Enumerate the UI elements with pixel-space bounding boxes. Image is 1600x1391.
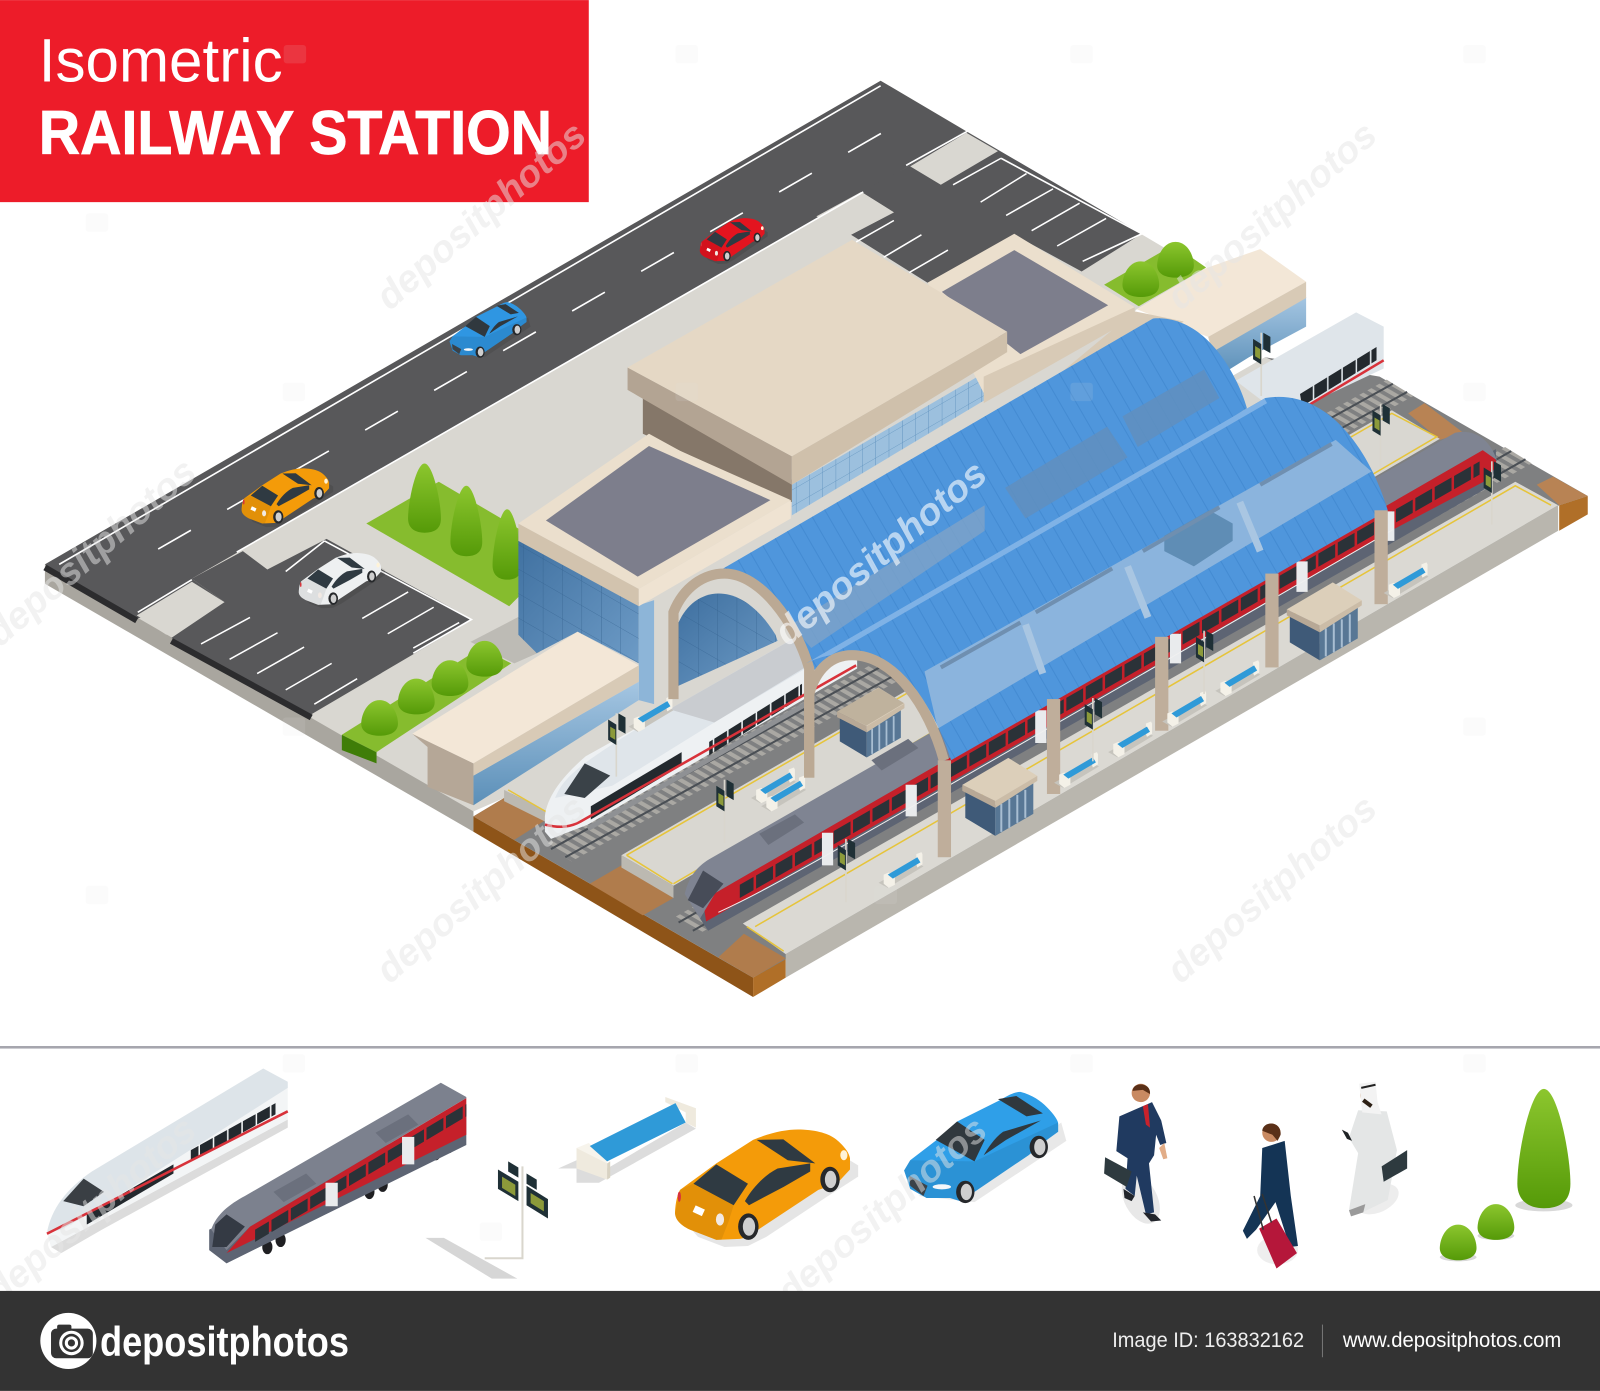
far white train end <box>1236 312 1384 406</box>
central roof block <box>628 240 1007 502</box>
divider line <box>0 1046 1600 1049</box>
back platform <box>504 357 1306 823</box>
item: orange taxi <box>675 1129 858 1247</box>
front canopy roof <box>804 396 1388 778</box>
front platform furniture <box>838 461 1501 902</box>
footer divider <box>1322 1325 1323 1357</box>
watermarks overlaid on the whole picture: depositphotos <box>1158 113 1385 317</box>
title panel <box>0 0 589 202</box>
watermarks overlaid on the whole picture: depositphotos <box>367 786 594 991</box>
cars on the road <box>242 218 768 608</box>
title panel: Isometric <box>39 27 283 95</box>
footer website: www.depositphotos.com <box>1342 1328 1561 1352</box>
rail base with brown earth ends <box>473 357 1588 997</box>
road and car parks <box>45 81 1142 717</box>
near wing building <box>412 632 639 805</box>
platform items on the island and back platform <box>608 333 1390 843</box>
front platform <box>743 482 1558 978</box>
title panel: RAILWAY STATION <box>39 99 552 168</box>
footer image id: Image ID: 163832162 <box>1112 1328 1304 1352</box>
ground slab <box>45 81 1205 832</box>
canopy pillars <box>938 510 1388 857</box>
red regional train <box>685 432 1497 931</box>
back rail track <box>545 380 1413 861</box>
footer logo: camera badge <box>40 1313 96 1369</box>
lawn with conifers <box>366 464 526 606</box>
right roof terrace <box>928 234 1184 403</box>
item: bench <box>558 1097 696 1183</box>
watermarks overlaid on the whole picture: depositphotos <box>769 1108 995 1312</box>
item: shrubs and conifer <box>1440 1089 1572 1261</box>
hedge with bushes <box>342 641 511 763</box>
watermarks overlaid on the whole picture: depositphotos <box>367 113 594 317</box>
watermarks overlaid on the whole picture: depositphotos <box>1158 786 1385 991</box>
footer logo wordmark: depositphotos <box>100 1318 349 1365</box>
main building: glass walls <box>518 373 985 704</box>
left roof terrace <box>518 434 791 606</box>
item: white high-speed train <box>47 1068 288 1253</box>
far wing building <box>1137 249 1306 376</box>
watermark over roof: depositphotos <box>766 452 995 653</box>
footer bar <box>0 1291 1600 1391</box>
front rail track <box>672 447 1532 934</box>
item: traveller with red suitcase <box>1243 1123 1298 1268</box>
item: man in white thobe <box>1342 1082 1407 1221</box>
item: businessman with briefcase <box>1104 1084 1168 1230</box>
small lawn top right <box>1104 242 1206 306</box>
item: red regional train <box>209 1083 466 1263</box>
item: platform sign <box>426 1161 548 1279</box>
island platform <box>621 410 1440 898</box>
back canopy roof <box>668 318 1247 778</box>
high-speed white train <box>545 635 857 839</box>
item: blue sedan <box>904 1092 1066 1203</box>
